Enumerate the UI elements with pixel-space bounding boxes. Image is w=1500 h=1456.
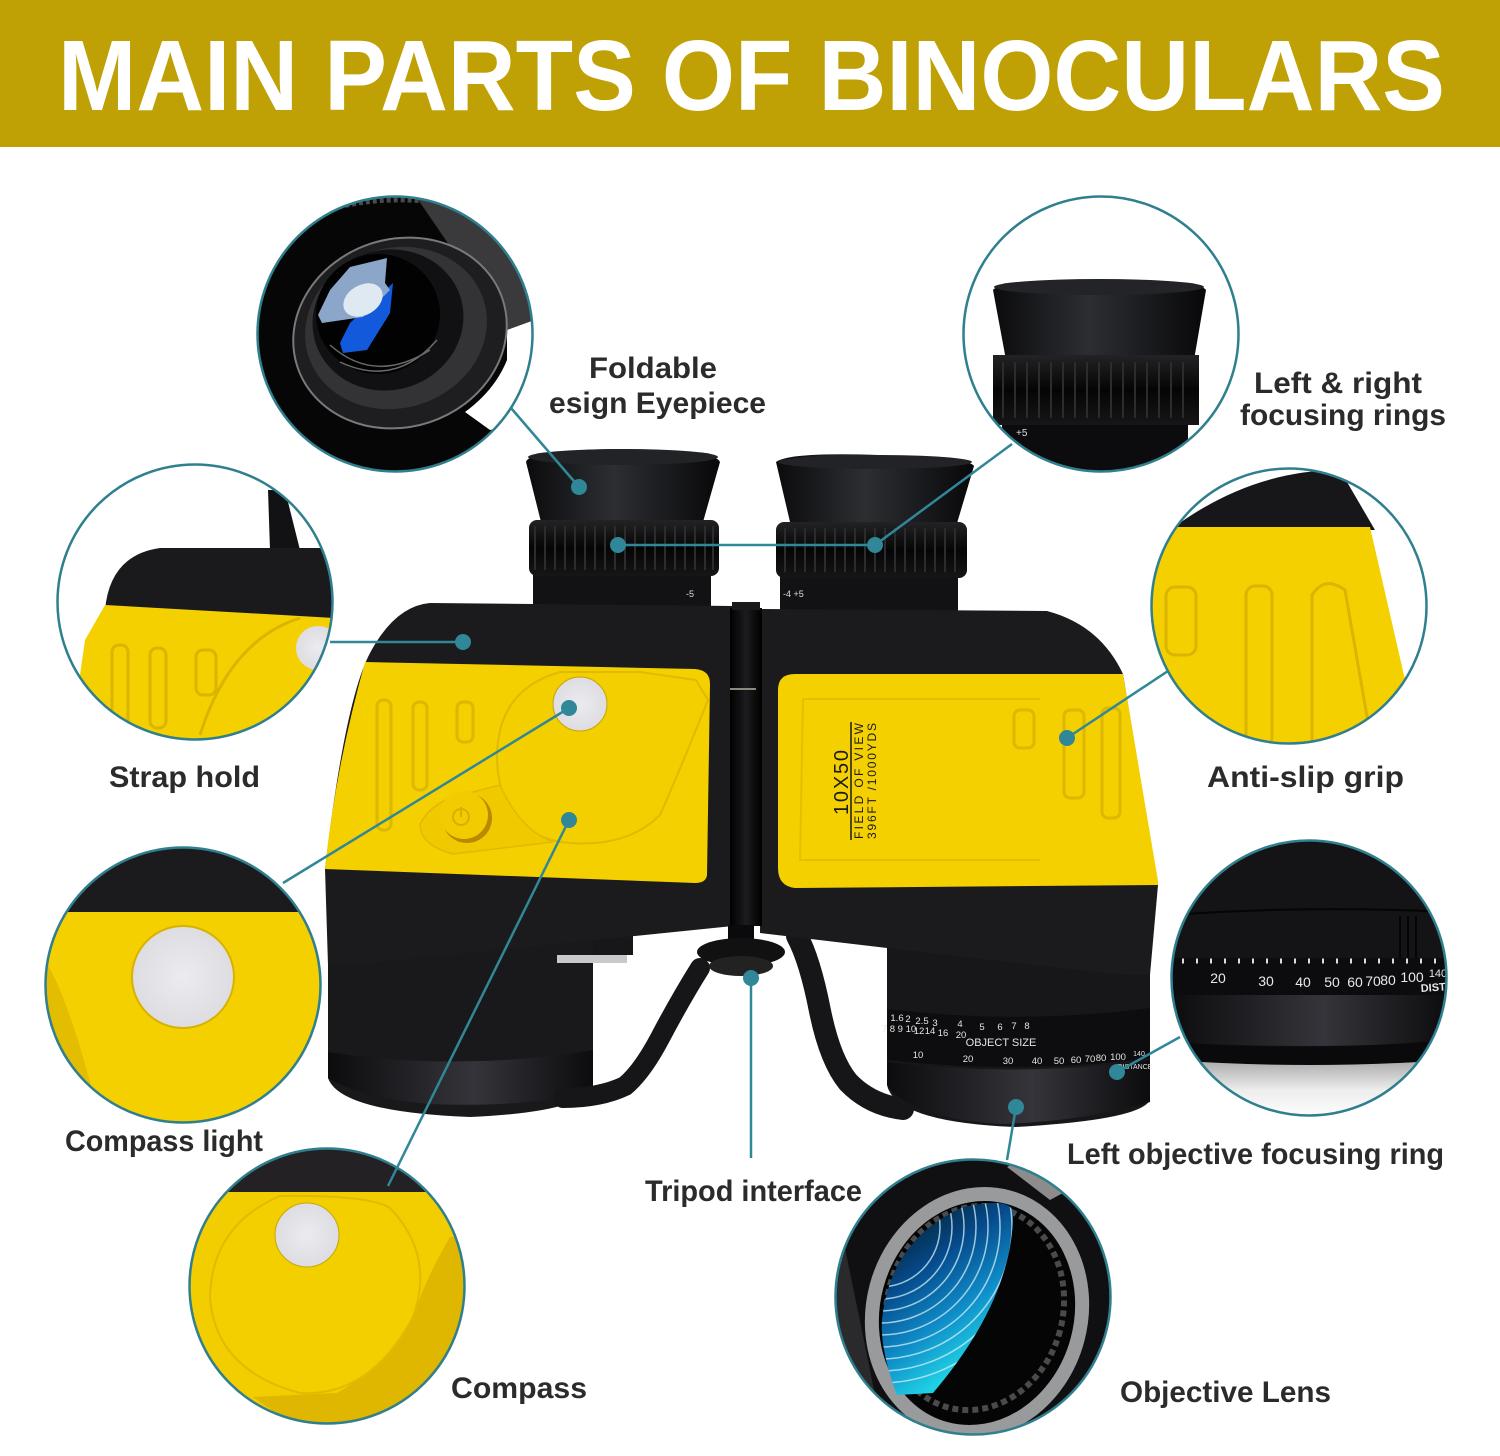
main body [325, 602, 1158, 976]
label: tripod interface: Tripod interface [645, 1175, 862, 1208]
circle: anti-slip grip detail [1150, 465, 1430, 750]
neck strap [563, 936, 903, 1109]
label: objective lens: Objective Lens [1120, 1376, 1331, 1409]
circle: focusing rings detail [960, 190, 1250, 485]
left yellow armor [325, 662, 710, 883]
right eyepiece [776, 454, 974, 615]
binoculars product photo [325, 449, 1158, 1127]
object size scale: 16 [938, 1028, 948, 1039]
circle: objective lens detail [834, 1158, 1112, 1436]
circle: compass detail [188, 1148, 470, 1430]
label: compass: Compass [451, 1372, 587, 1405]
object size scale [882, 1013, 1036, 1049]
object size scale: 2.5 [915, 1016, 929, 1027]
circle: objective focusing ring detail [1170, 840, 1476, 1120]
distance scale: 50 [1054, 1056, 1064, 1067]
distance scale: DISTANCE [1118, 1064, 1153, 1071]
object size scale: 7 8 9 10 [882, 1024, 916, 1035]
power button [420, 785, 553, 854]
left eyepiece [526, 449, 720, 615]
printed spec: 396FT /1000YDS [865, 723, 879, 839]
labels [65, 352, 1446, 1409]
object size scale: 7 [1011, 1021, 1017, 1032]
label: compass light: Compass light [65, 1125, 263, 1158]
circle: eyepiece detail [250, 190, 540, 480]
scale numbers [1210, 970, 1446, 992]
compass cover [497, 672, 708, 843]
left objective barrel [328, 860, 633, 1117]
printed spec: 10X50 [831, 750, 853, 815]
label: left objective focusing ring: Left objective focusing ring [1067, 1138, 1444, 1171]
compass light window [553, 677, 607, 731]
object size scale: 3 [932, 1018, 938, 1029]
distance scale: 10 [913, 1050, 923, 1061]
scale numbers: 40 [1295, 974, 1311, 990]
label: focusing rings line 2: focusing rings [1240, 399, 1446, 432]
scale numbers: 20 [1210, 970, 1226, 986]
distance scale: 100 [1110, 1052, 1126, 1063]
printed spec: FIELD OF VIEW [852, 722, 866, 839]
title: MAIN PARTS OF BINOCULARS [58, 20, 1445, 132]
leader lines [283, 408, 1180, 1186]
object size scale: 8 [1024, 1021, 1030, 1032]
object size scale: 14 [925, 1026, 935, 1037]
circle: compass light detail [45, 845, 321, 1125]
distance scale: 40 [1032, 1056, 1042, 1067]
object size scale: 20 [956, 1030, 966, 1041]
right eyepiece: -4 +5 [783, 589, 804, 599]
label: focusing rings line 1: Left & right [1254, 367, 1422, 400]
object size scale: OBJECT SIZE [966, 1037, 1036, 1049]
distance scale: 80 [1096, 1053, 1106, 1064]
circle: focusing rings detail: +5 [1016, 428, 1028, 439]
scale numbers: 30 [1258, 973, 1274, 989]
distance scale: 30 [1003, 1056, 1013, 1067]
printed spec [831, 722, 879, 840]
label: design eyepiece: esign Eyepiece [549, 387, 766, 420]
scale numbers: 50 [1324, 974, 1340, 990]
object size scale: 4 [957, 1019, 963, 1030]
object size scale: 5 [979, 1022, 985, 1033]
label: foldable eyepiece: Foldable [589, 352, 717, 385]
header banner [0, 0, 1500, 147]
scale numbers: 80 [1380, 972, 1396, 988]
label: anti-slip grip: Anti-slip grip [1207, 761, 1404, 794]
leader dots [455, 479, 1125, 1115]
object size scale: 6 [997, 1022, 1003, 1033]
scale numbers: 60 [1347, 974, 1363, 990]
distance scale: 60 [1071, 1055, 1081, 1066]
object size scale: 1.6 [890, 1013, 904, 1024]
object size scale: 12 [914, 1026, 924, 1037]
scale numbers: 70 [1365, 973, 1381, 989]
left eyepiece: -5 [686, 589, 694, 599]
distance scale: 70 [1085, 1054, 1095, 1065]
object size scale: 2 [905, 1014, 911, 1025]
distance scale [913, 1050, 1153, 1071]
distance scale: 140 [1133, 1051, 1145, 1058]
right objective barrel [882, 935, 1153, 1127]
circle: strap hold detail [55, 460, 340, 745]
right yellow armor [778, 674, 1158, 888]
scale numbers: 100 [1400, 969, 1424, 985]
scale numbers: DISTANCE [1420, 979, 1476, 995]
scale numbers: 140 [1429, 968, 1447, 980]
grip ridges [377, 700, 473, 830]
distance scale: 20 [963, 1054, 973, 1065]
label: strap hold: Strap hold [109, 761, 260, 794]
